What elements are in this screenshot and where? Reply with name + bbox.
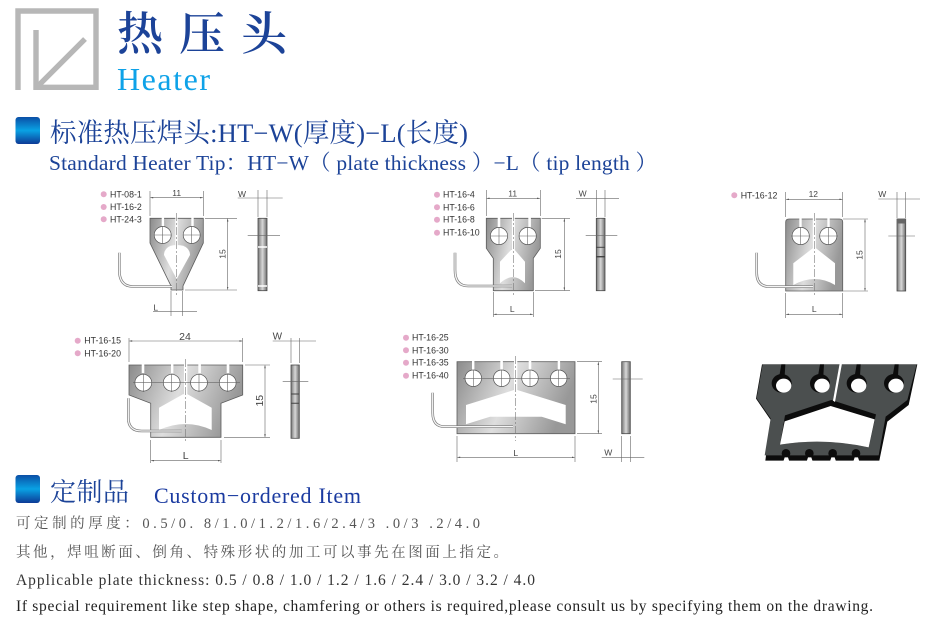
dimensions: L <box>513 448 518 458</box>
dimensions: L <box>510 304 515 314</box>
heading: custom-ordered English: Custom−ordered Item <box>154 483 361 508</box>
side view <box>273 332 316 438</box>
model labels: HT-16-40 <box>412 371 449 381</box>
model labels: HT-24-3 <box>110 214 142 224</box>
dimensions: 15 <box>218 249 228 259</box>
figure: HT-16-4 group <box>434 188 619 317</box>
side view: W <box>878 189 886 199</box>
plate drawing <box>119 213 203 295</box>
model labels: HT-16-6 <box>443 202 475 212</box>
dimensions: 12 <box>809 189 818 199</box>
model labels: HT-16-20 <box>84 348 121 358</box>
plate drawing <box>757 213 843 297</box>
text: special shape Chinese: 其他，焊咀断面、倒角、特殊形状的加工可以事先在图面上指定。 <box>16 544 508 561</box>
dimensions <box>150 188 237 316</box>
model labels: HT-16-4 <box>443 190 475 200</box>
side view: W <box>604 448 612 458</box>
dimensions <box>457 362 602 462</box>
dimensions: 15 <box>588 394 598 404</box>
text: special requirement English: If special requirement like step shape, chamfering or others is required,please consult us by specifying them on the drawing. <box>16 598 873 615</box>
plate drawing <box>455 213 540 296</box>
title: English: Heater <box>117 61 210 97</box>
plate drawing <box>433 356 575 441</box>
model labels: HT-16-35 <box>412 358 449 368</box>
model label: HT-16-12 <box>741 190 777 200</box>
model labels: HT-16-10 <box>443 228 480 238</box>
icon: section marker custom <box>16 475 40 503</box>
text: thickness English: Applicable plate thickness: 0.5 / 0.8 / 1.0 / 1.2 / 1.6 / 2.4 / 3.0 / 3.2 / 4.0 <box>16 572 535 589</box>
model labels: HT-16-25 <box>412 333 449 343</box>
dimensions: L <box>153 302 158 312</box>
model labels: HT-16-15 <box>84 336 121 346</box>
icon: grey square logo <box>18 11 96 90</box>
figure: HT-16-12 group <box>731 189 920 318</box>
dimensions: 24 <box>179 331 191 343</box>
side view <box>878 189 920 291</box>
dimensions: 11 <box>508 188 517 198</box>
dimensions: 15 <box>254 395 266 407</box>
dimensions: 15 <box>553 249 563 259</box>
model labels: HT-16-30 <box>412 345 449 355</box>
figure: HT-16-15 group <box>75 331 316 463</box>
icon: section marker standard <box>16 117 40 144</box>
model labels: HT-08-1 <box>110 189 142 199</box>
model labels: HT-16-8 <box>443 215 475 225</box>
dimensions: 15 <box>854 250 864 260</box>
text: thickness Chinese: 可定制的厚度：0.5/0. 8/1.0/1.2/1.6/2.4/3 .0/3 .2/4.0 <box>16 514 480 532</box>
dimensions <box>786 189 868 318</box>
figure: HT-16-25 group <box>403 333 644 462</box>
model labels <box>101 189 142 224</box>
model labels <box>434 190 480 238</box>
plate drawing <box>128 359 243 443</box>
heading: standard heater tip Chinese: 标准热压焊头:HT−W(厚度)−L(长度) <box>50 118 468 148</box>
heading: custom-ordered Chinese: 定制品 <box>50 478 129 507</box>
side view: W <box>579 188 587 198</box>
dimensions: L <box>183 450 189 462</box>
title: Chinese: 热压头 <box>117 9 290 60</box>
side view <box>576 188 619 291</box>
side view: W <box>238 189 246 199</box>
side view: W <box>273 332 283 342</box>
side view <box>238 189 283 291</box>
heading: standard heater tip English: Standard Heater Tip：HT−W（ plate thickness ）−L（ tip length ） <box>49 151 657 175</box>
dimensions: 11 <box>172 188 181 198</box>
dimensions <box>129 331 270 463</box>
dimensions <box>486 188 570 317</box>
model labels <box>403 333 449 381</box>
side view <box>602 362 644 462</box>
model labels: HT-16-2 <box>110 202 142 212</box>
dimensions: L <box>812 304 817 314</box>
figure: HT-08-1 group <box>101 188 283 316</box>
model labels <box>75 336 121 358</box>
photo: black heater tip <box>756 363 917 461</box>
